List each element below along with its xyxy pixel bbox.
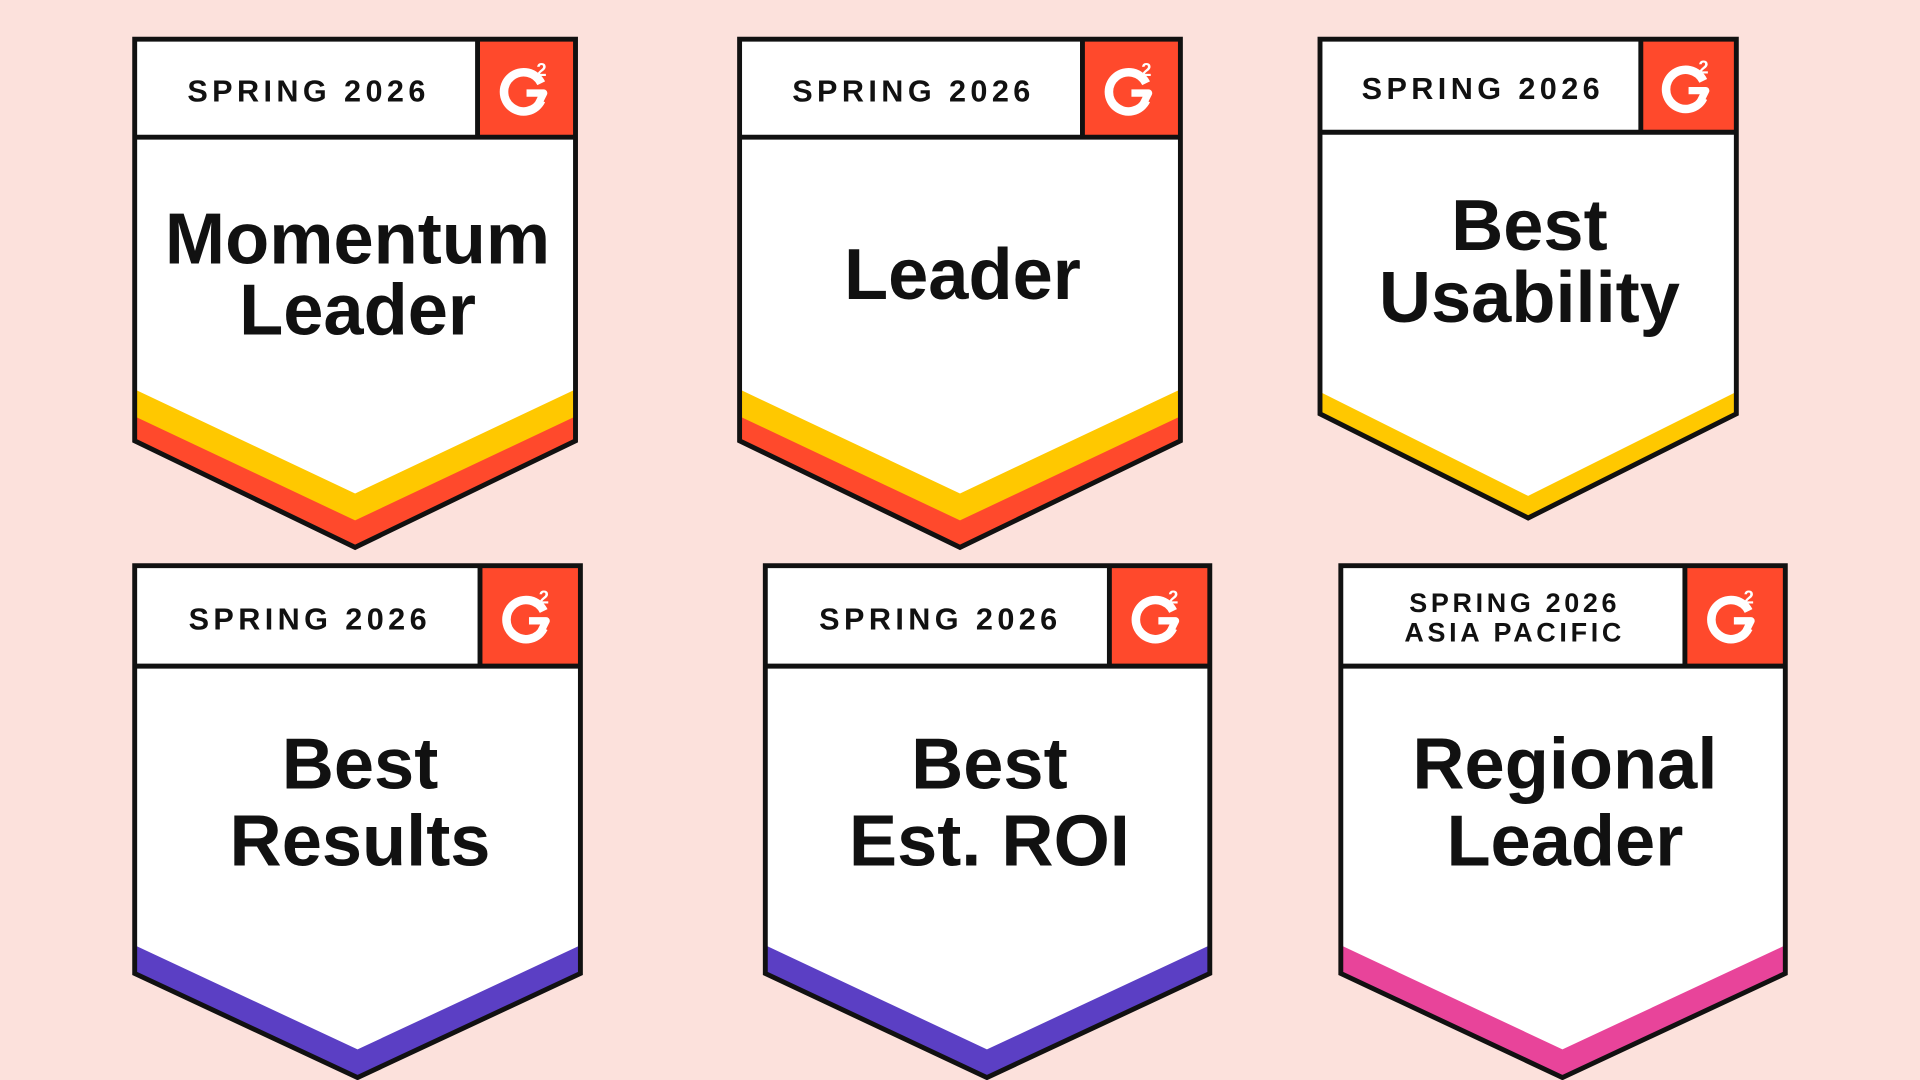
badge: Best Usability: Best [1451,186,1608,266]
badge: Regional Leader: SPRING 2026 [1409,588,1620,618]
badge: Regional Leader: Regional [1412,725,1717,805]
badge: Momentum Leader: Momentum [165,199,550,279]
badge: Momentum Leader [135,39,576,547]
badge: Best Est. ROI: Est. ROI [849,802,1130,882]
badge: Regional Leader [1341,566,1785,1078]
badge: Leader [740,39,1180,547]
badge: Momentum Leader: Leader [239,270,476,350]
badge: Best Results: SPRING 2026 [189,602,431,636]
badge: Momentum Leader: SPRING 2026 [187,75,430,109]
badge: Best Usability [1320,39,1736,518]
badge: Leader: Leader [844,235,1081,315]
badge: Best Usability: Usability [1379,258,1680,338]
badge: Regional Leader: ASIA PACIFIC [1404,618,1625,648]
badge: Best Est. ROI: SPRING 2026 [819,602,1062,636]
badge: Best Results: Best [282,725,438,805]
badge: Best Results [135,566,580,1078]
badge: Leader: SPRING 2026 [792,75,1035,109]
badge: Best Usability: SPRING 2026 [1362,72,1604,106]
badge: Best Results: Results [230,802,490,882]
badge: Best Est. ROI: Best [911,725,1068,805]
badge: Best Est. ROI [765,566,1210,1078]
badge: Regional Leader: Leader [1446,802,1683,882]
